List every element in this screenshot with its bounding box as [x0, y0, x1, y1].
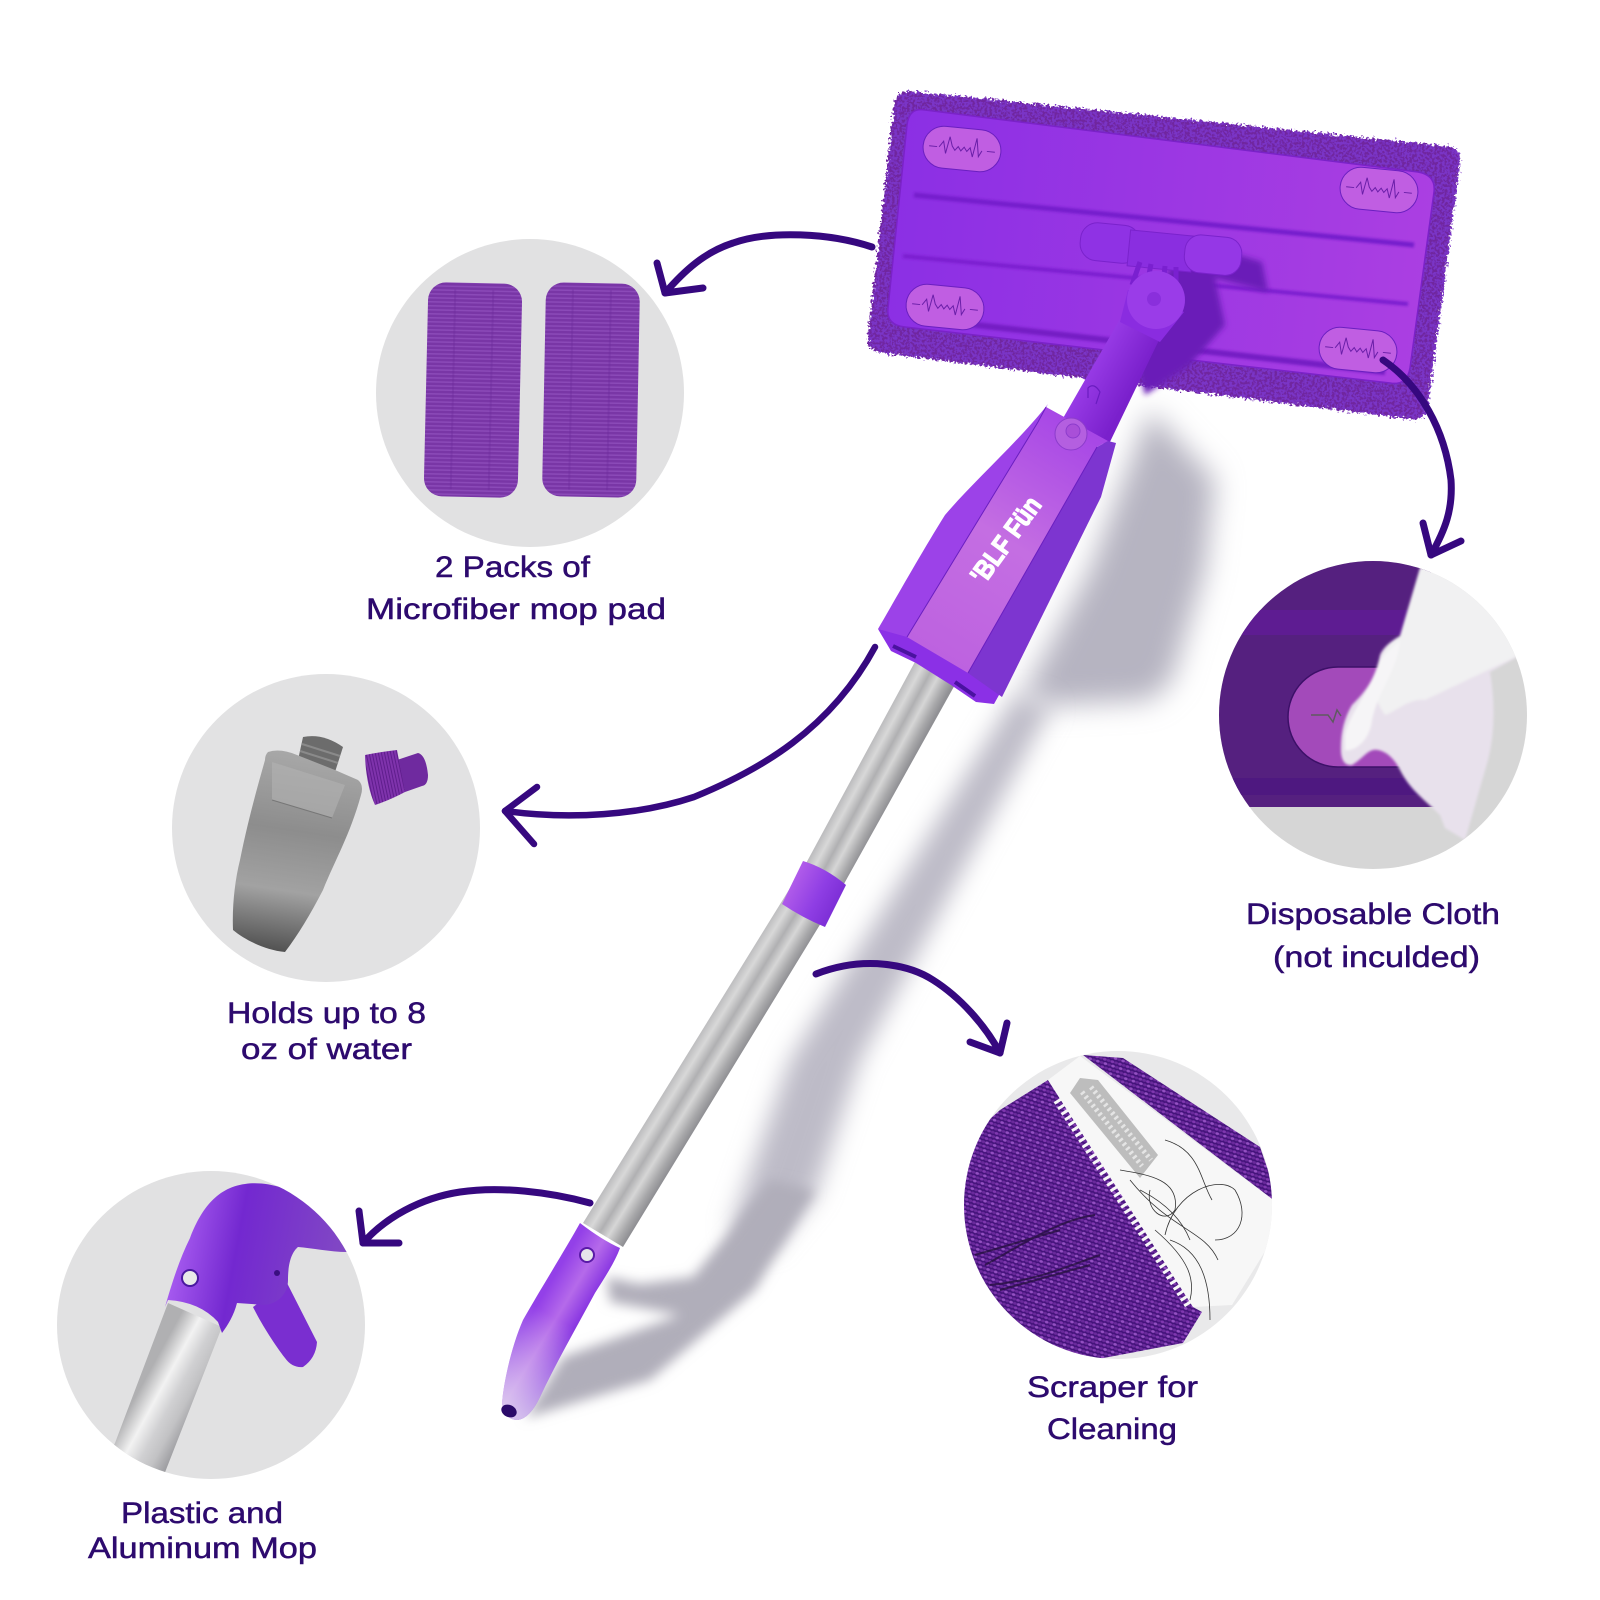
- label: disposable cloth: Disposable Cloth: [1246, 898, 1500, 931]
- panel: plastic and aluminum: [57, 1171, 365, 1480]
- icon: bottle body: [233, 751, 362, 952]
- mop spray tip: [499, 1223, 620, 1420]
- label: water tank: [227, 997, 426, 1066]
- label: scraper: Scraper for: [1027, 1371, 1198, 1404]
- water tank collar: [878, 404, 1116, 704]
- icon: left microfiber pad: [424, 282, 522, 498]
- label: disposable cloth: [1246, 898, 1500, 974]
- icon: bottle neck: [298, 736, 343, 772]
- fabric close-up: [950, 1080, 1202, 1370]
- mop plate: [888, 110, 1434, 383]
- label: mop pads: Microfiber mop pad: [366, 593, 666, 626]
- purple head: [165, 1183, 347, 1333]
- panel: disposable cloth: [1210, 550, 1530, 869]
- white scraper blade: [1048, 1056, 1280, 1307]
- panel: scraper: [950, 1051, 1280, 1370]
- icon: right microfiber pad: [542, 282, 640, 498]
- purple pole ring: [782, 861, 846, 927]
- hair strands: [1120, 1140, 1242, 1320]
- label: scraper: [1027, 1371, 1198, 1446]
- pole close-up: [114, 1303, 221, 1472]
- drop shadow of the mop: [525, 410, 1215, 1418]
- label: water tank: oz of water: [241, 1033, 412, 1066]
- arrow: pole to plastic and aluminum detail: [359, 1190, 590, 1243]
- microfiber pad of mop head: [868, 91, 1460, 419]
- plate grip ovals: [904, 124, 1420, 375]
- white cloth: [1341, 562, 1530, 840]
- panel: water tank: [172, 674, 480, 982]
- water tank collar: 'BLF Fün: [964, 491, 1048, 589]
- purple plate close-up: [1219, 561, 1434, 807]
- grey rubber strip: [1070, 1078, 1158, 1178]
- label: plastic and aluminum: Plastic and: [121, 1497, 283, 1530]
- trigger: [253, 1283, 317, 1367]
- mop product: [499, 91, 1460, 1420]
- handle neck and pivot: [1062, 271, 1185, 446]
- label: water tank: Holds up to 8: [227, 997, 426, 1030]
- label: mop pads: [366, 551, 666, 626]
- arrow: mop head to pads: [657, 235, 872, 293]
- label: scraper: Cleaning: [1047, 1413, 1177, 1446]
- arrow: pad to disposable cloth: [1383, 360, 1461, 555]
- label: plastic and aluminum: [88, 1497, 317, 1565]
- arrow: collar to water tank: [505, 647, 875, 844]
- arrow: pole to scraper: [816, 964, 1007, 1053]
- label: plastic and aluminum: Aluminum Mop: [88, 1532, 317, 1565]
- panel: mop pads: [376, 239, 684, 547]
- label: mop pads: 2 Packs of: [435, 551, 591, 584]
- grip oval close-up: [1287, 666, 1400, 768]
- fabric upper strip: [1083, 1055, 1280, 1205]
- icon: purple cap: [365, 750, 428, 805]
- handle bracket on plate: [1078, 221, 1268, 395]
- dark hair on fabric: [975, 1215, 1100, 1290]
- upper aluminium pole: [797, 634, 971, 900]
- lower aluminium pole: [583, 880, 835, 1247]
- label: disposable cloth: (not inculded): [1273, 941, 1480, 974]
